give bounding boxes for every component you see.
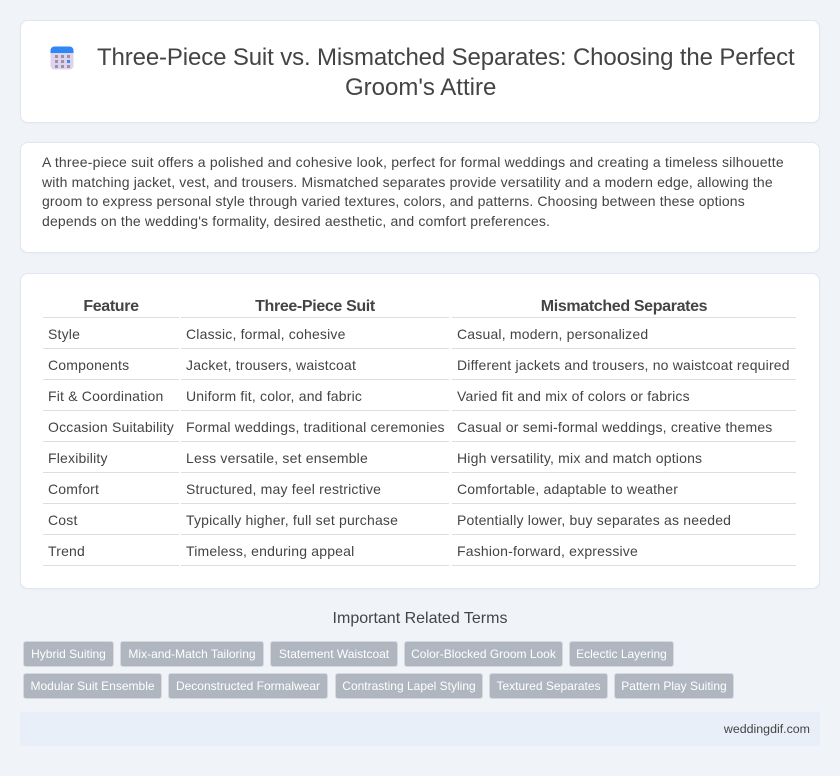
tag group: related terms: Pattern Play Suiting [621,679,727,693]
row: Occasion Suitability: Casual or semi-formal weddings, creative themes [457,419,772,435]
tag group: related terms: Eclectic Layering [576,647,667,661]
tag group: related terms: Textured Separates [496,679,601,693]
panel: intro text [20,142,820,253]
text block: introduction: with matching jacket, vest, and trousers. Mismatched separates provide versatility and a modern edge, allowing the [42,174,773,190]
row: Components: Different jackets and trousers, no waistcoat required [457,357,790,373]
text block: introduction: depends on the wedding's formality, desired aesthetic, and comfort preferences. [42,213,550,229]
row: Style [43,326,796,349]
heading: related terms: Important Related Terms [333,610,507,627]
row: Cost [43,512,796,535]
row: Components [43,357,796,380]
table header row [43,298,796,318]
text block: introduction: A three-piece suit offers a polished and cohesive look, perfect for formal weddings and creating a timeless silhouette [42,154,784,170]
title: Groom's Attire [345,74,496,101]
row: Flexibility: High versatility, mix and match options [457,450,702,466]
row: Trend: Trend [48,543,85,559]
row: Components: Jacket, trousers, waistcoat [186,357,356,373]
tag group: related terms: Mix-and-Match Tailoring [128,647,256,661]
row: Comfort [43,481,796,504]
tag group: related terms: Color-Blocked Groom Look [411,647,556,661]
row: Occasion Suitability: Occasion Suitability [48,419,174,435]
row: Components: Components [48,357,129,373]
row: Style: Casual, modern, personalized [457,326,648,342]
row: Fit & Coordination: Uniform fit, color, and fabric [186,388,362,404]
row: Occasion Suitability: Formal weddings, traditional ceremonies [186,419,445,435]
icon: calendar [50,46,74,70]
tag group: related terms: Modular Suit Ensemble [30,679,155,693]
row: Trend: Fashion-forward, expressive [457,543,638,559]
row: Fit & Coordination: Fit & Coordination [48,388,163,404]
tag group: related terms: Hybrid Suiting [31,647,106,661]
row: Comfort: Comfortable, adaptable to weather [457,481,678,497]
table header row: Mismatched Separates [541,298,707,315]
row: Comfort: Comfort [48,481,99,497]
row: Trend [43,543,796,566]
row: Cost: Typically higher, full set purchase [186,512,398,528]
row: Cost: Cost [48,512,78,528]
tag group: related terms [23,641,734,699]
row: Style: Style [48,326,80,342]
row: Flexibility: Less versatile, set ensemble [186,450,368,466]
tag group: related terms: Deconstructed Formalwear [176,679,320,693]
row: Fit & Coordination: Varied fit and mix of colors or fabrics [457,388,690,404]
title [97,44,794,101]
row: Style: Classic, formal, cohesive [186,326,346,342]
row: Comfort: Structured, may feel restrictive [186,481,381,497]
row: Cost: Potentially lower, buy separates as needed [457,512,731,528]
tag group: related terms: Contrasting Lapel Styling [342,679,476,693]
row: Flexibility [43,450,796,473]
footer bar [20,712,820,746]
title: Three-Piece Suit vs. Mismatched Separates: Choosing the Perfect [97,44,794,71]
text block: introduction: groom to express personal style through varied textures, colors, and patterns. Choosing between these options [42,193,745,209]
row: Fit & Coordination [43,388,796,411]
tag group: related terms: Statement Waistcoat [279,647,389,661]
panel: title card [20,20,820,123]
row: Trend: Timeless, enduring appeal [186,543,354,559]
text block: introduction [42,154,784,229]
table header row: Three-Piece Suit [255,298,375,315]
footer source text: weddingdif.com [724,722,810,736]
panel: comparison table [20,273,820,589]
row: Flexibility: Flexibility [48,450,108,466]
table header row: Feature [83,298,139,315]
row: Occasion Suitability [43,419,796,442]
